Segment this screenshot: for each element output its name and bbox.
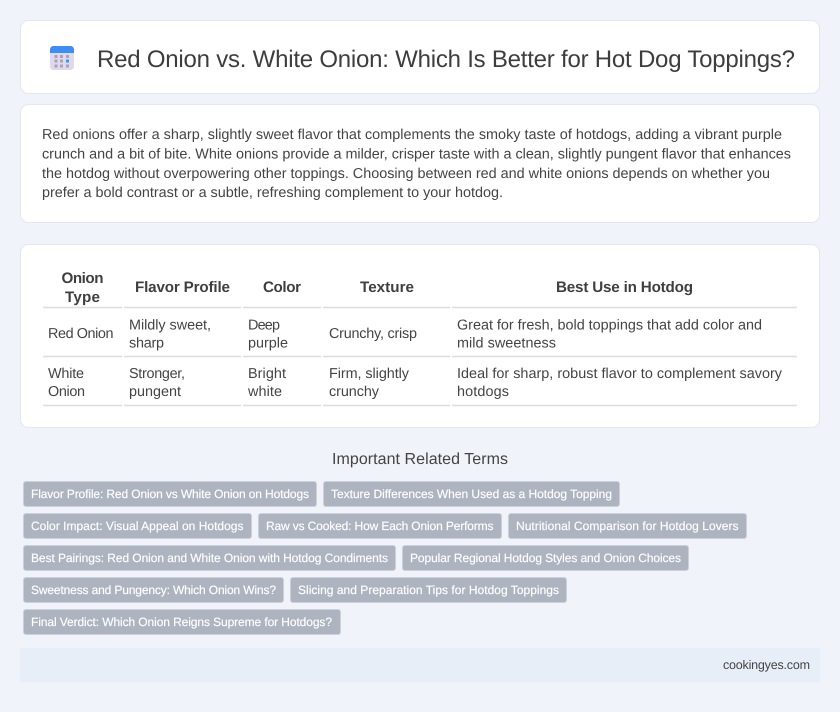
tag: Color Impact: Visual Appeal on Hotdogs [31, 519, 244, 533]
tag: Nutritional Comparison for Hotdog Lovers [516, 519, 738, 533]
table row: red onion [43, 318, 797, 356]
table row: red onion: Deep [248, 318, 280, 334]
table header row: Flavor Profile [135, 279, 230, 296]
table row: white onion: pungent [129, 384, 181, 400]
text block: introduction paragraph: prefer a bold contrast or a subtle, refreshing complement to your hotdog. [42, 185, 503, 201]
table row: white onion: Stronger, [129, 366, 185, 382]
table header row: Texture [360, 279, 414, 296]
panel: comparison table [20, 244, 820, 428]
tag: Raw vs Cooked: How Each Onion Performs [266, 519, 494, 533]
tag [324, 482, 620, 506]
table header row: Color [263, 279, 301, 296]
tag [24, 482, 316, 506]
tag: Flavor Profile: Red Onion vs White Onion on Hotdogs [31, 487, 309, 501]
panel: title header [20, 20, 820, 94]
footer source text: cookingyes.com [723, 658, 810, 672]
tag list: related terms [24, 482, 746, 634]
tag: Best Pairings: Red Onion and White Onion with Hotdog Condiments [31, 551, 388, 565]
footer [20, 648, 820, 682]
table header row: Onion [62, 270, 104, 287]
tag [24, 546, 396, 570]
table row: white onion: white [247, 384, 282, 400]
tag: Popular Regional Hotdog Styles and Onion Choices [410, 551, 681, 565]
tag [258, 514, 502, 538]
heading: important related terms: Important Related Terms [332, 451, 508, 468]
table row: red onion: Crunchy, crisp [329, 326, 417, 342]
tag [24, 610, 340, 634]
table row: white onion: Firm, slightly [329, 366, 410, 382]
tag [24, 514, 252, 538]
text block: introduction paragraph: the hotdog without overpowering other toppings. Choosing between red and white onions depends on whether you [42, 166, 770, 182]
title: Red Onion vs. White Onion: Which Is Better for Hot Dog Toppings? [97, 46, 795, 73]
table row: red onion: purple [248, 336, 288, 352]
table row: red onion: Mildly sweet, [129, 318, 211, 334]
table row: white onion: Onion [48, 384, 85, 400]
tag: Final Verdict: Which Onion Reigns Supreme for Hotdogs? [31, 615, 332, 629]
text block: introduction paragraph: Red onions offer a sharp, slightly sweet flavor that complements the smoky taste of hotdogs, adding a vibrant purple [42, 127, 782, 143]
icon: calendar [50, 46, 74, 70]
tag [402, 546, 688, 570]
table row: red onion: Great for fresh, bold toppings that add color and [457, 318, 762, 334]
tag [290, 578, 566, 602]
tag [508, 514, 746, 538]
tag: Sweetness and Pungency: Which Onion Wins? [31, 583, 276, 597]
tag: Texture Differences When Used as a Hotdog Topping [331, 487, 612, 501]
tag [24, 578, 284, 602]
table row: white onion: Ideal for sharp, robust flavor to complement savory [457, 366, 783, 382]
table row: white onion: White [48, 366, 84, 382]
table row: red onion: Red Onion [48, 326, 114, 342]
table header row: Type [65, 289, 100, 306]
table row: white onion: crunchy [329, 384, 380, 400]
tag: Slicing and Preparation Tips for Hotdog Toppings [298, 583, 559, 597]
text block: introduction paragraph [42, 127, 791, 201]
table header row: Best Use in Hotdog [556, 279, 693, 296]
table row: red onion: mild sweetness [457, 336, 556, 352]
text block: introduction paragraph: crunch and a bit of bite. White onions provide a milder, crisper taste with a clean, slightly pungent flavor that enhances [42, 146, 791, 162]
panel: introduction [20, 104, 820, 222]
table row: red onion: sharp [129, 336, 164, 352]
table row: white onion: hotdogs [457, 384, 509, 400]
table row: white onion: Bright [248, 366, 286, 382]
table header row [43, 270, 797, 308]
table row: white onion [43, 366, 797, 406]
